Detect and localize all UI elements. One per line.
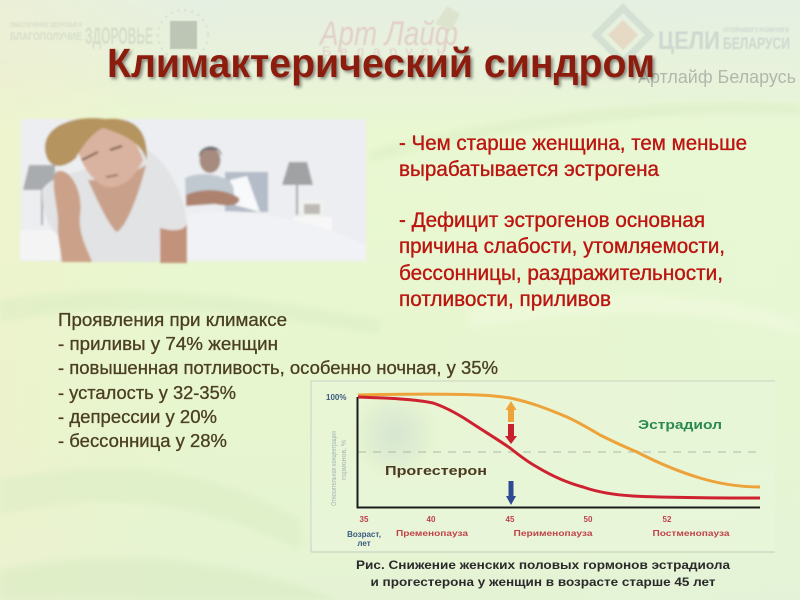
watermark: Артлайф Беларусь (638, 67, 796, 87)
curve labels: Эстрадиол (638, 417, 722, 432)
text block: estrogen deficiency: бессонницы, раздражительности, (399, 262, 723, 285)
text block: menopause manifestations: - приливы у 74% женщин (58, 334, 278, 354)
text block: menopause manifestations: - повышенная потливость, особенно ночная, у 35% (58, 358, 498, 378)
progesterone curve (358, 397, 760, 498)
bed (186, 211, 366, 261)
woman: face (76, 125, 143, 187)
age ticks: 45 (506, 515, 515, 524)
logo: health programme: БЛАГОПОЛУЧИЕ (10, 31, 82, 43)
logo: health programme (10, 10, 208, 60)
chart caption (356, 558, 730, 589)
age ticks (360, 515, 672, 524)
text block: estrogen deficiency (399, 209, 725, 311)
x axis label: Возраст, (347, 530, 381, 539)
text block: menopause manifestations: - депрессии у 20% (58, 407, 217, 427)
text block: estrogen deficiency: - Дефицит эстрогенов основная (399, 209, 705, 232)
text block: estrogen decline: - Чем старше женщина, тем меньше (399, 132, 747, 155)
arrows (506, 401, 516, 422)
age ticks: 50 (584, 515, 593, 524)
chart: hormone decline: Прогестерон (385, 463, 487, 478)
phase labels: Постменопауза (652, 529, 730, 538)
lamp left (23, 165, 55, 190)
text block: estrogen deficiency: потливости, приливов (399, 288, 611, 311)
y axis label: гормонов, % (341, 440, 348, 480)
logo: Art Life Belarus (318, 6, 460, 59)
logo: Art Life Belarus: Арт Лайф (318, 15, 458, 53)
woman: left arm and hand (54, 171, 92, 262)
age ticks: 52 (663, 515, 672, 524)
dashed reference line (358, 451, 762, 453)
headboard (225, 172, 268, 212)
chart caption: и прогестерона у женщин в возрасте старше 45 лет (370, 575, 716, 589)
age ticks: 35 (360, 515, 369, 524)
chart: hormone decline: 100% (326, 393, 346, 402)
lamp right (282, 162, 313, 185)
axes (358, 397, 760, 508)
x axis label (347, 530, 381, 548)
woman: hair (45, 118, 147, 166)
text block: estrogen deficiency: причина слабости, утомляемости, (399, 235, 725, 258)
title: Климактерический синдром (107, 40, 655, 86)
age ticks: 40 (427, 515, 436, 524)
y axis label: Относительная концентрация (331, 431, 338, 506)
text block: menopause manifestations: - бессонница у 28% (58, 431, 227, 451)
text block: menopause manifestations: Проявления при климаксе (58, 310, 287, 330)
logo: Belarus goals: ЦЕЛИ (658, 27, 720, 55)
woman: neckline (88, 165, 146, 232)
chart: hormone decline (311, 381, 775, 552)
text block: menopause manifestations (58, 310, 498, 451)
text block: estrogen decline (399, 132, 747, 181)
logo: Art Life Belarus: Беларусь (322, 43, 444, 59)
text block: estrogen decline: вырабатывается эстрогена (399, 158, 659, 181)
woman: right arm (160, 224, 187, 263)
logo: Belarus goals (596, 8, 790, 62)
text block: menopause manifestations: - усталость у 32-35% (58, 383, 236, 403)
woman: shirt (42, 150, 187, 262)
man (185, 174, 235, 200)
y axis label (331, 431, 348, 506)
estradiol curve (358, 394, 760, 487)
x axis label: лет (357, 539, 371, 548)
phase labels: Пременопауза (396, 529, 469, 538)
photo: woman and man in bed (20, 118, 366, 263)
chart caption: Рис. Снижение женских половых гормонов эстрадиола (356, 558, 730, 572)
phase labels: Перименопауза (514, 529, 593, 538)
logo: health programme: ЗДОРОВЬЕ (85, 23, 153, 50)
logo: health programme: ОБЕСПЕЧЕНИЕ ЗДОРОВЬЯ И (10, 22, 82, 29)
phase labels (396, 529, 730, 538)
